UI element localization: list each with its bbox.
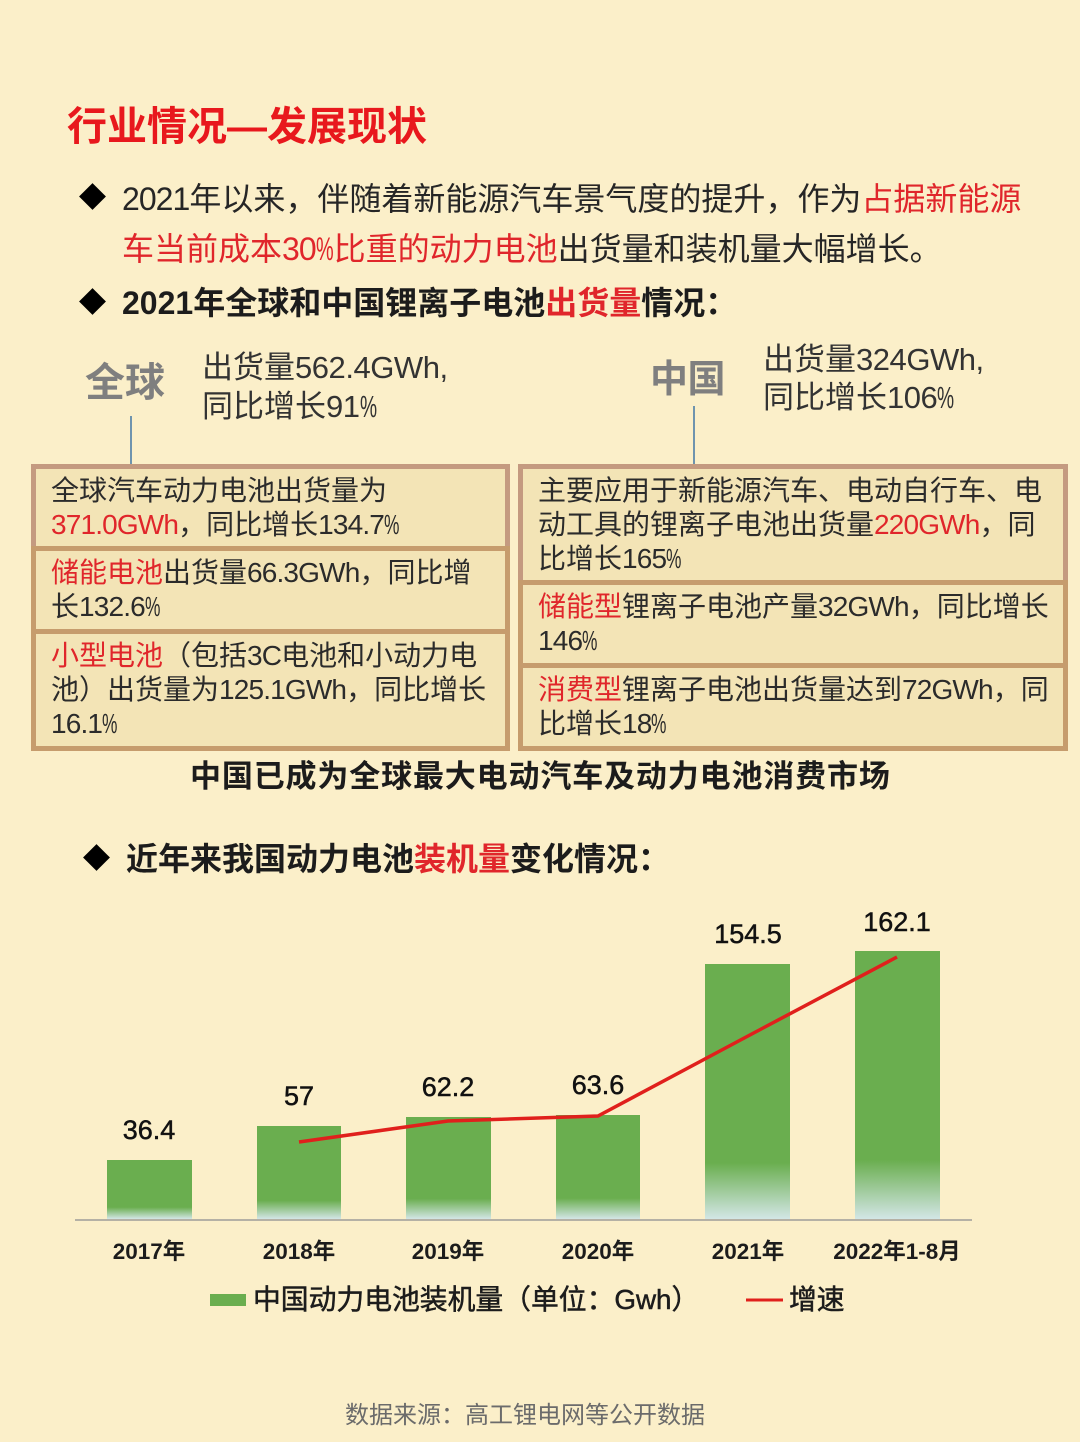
box: consumer type: % <box>651 708 667 739</box>
box: consumer type <box>518 663 1068 751</box>
text: small batteries <box>51 640 486 739</box>
axis line <box>75 1219 972 1221</box>
text: NEV batteries <box>538 475 1042 574</box>
text: energy storage <box>51 557 471 622</box>
bullet icon: shipments <box>79 288 106 315</box>
connector: China <box>693 406 695 466</box>
China totals: 出货量324GWh, <box>763 342 984 377</box>
panel: global breakdown <box>31 464 510 751</box>
box: storage type: % <box>582 625 598 656</box>
China totals: 同比增长106 <box>763 380 937 415</box>
heading: installations: 近年来我国动力电池装机量变化情况： <box>126 841 670 877</box>
China totals: % <box>937 380 954 415</box>
category labels: 2021年 <box>712 1239 784 1264</box>
box: small batteries: % <box>102 708 118 739</box>
text: power batteries: 全球汽车动力电池出货量为 <box>51 475 387 506</box>
text: NEV batteries: 主要应用于新能源汽车、电动自行车、电 <box>538 475 1042 506</box>
box: NEV batteries: % <box>666 543 682 574</box>
source note: 数据来源：高工锂电网等公开数据 <box>345 1402 705 1429</box>
box: NEV batteries <box>518 464 1068 586</box>
category labels: 2019年 <box>412 1239 484 1264</box>
box: small batteries: 池）出货量为125.1GWh，同比增长 <box>51 674 486 705</box>
bar value labels: 162.1 <box>863 907 931 937</box>
box: energy storage <box>31 546 510 635</box>
box: small batteries <box>31 629 510 751</box>
bar value labels: 62.2 <box>422 1072 474 1102</box>
bar value labels: 57 <box>284 1081 314 1111</box>
callout: market statement: 中国已成为全球最大电动汽车及动力电池消费市场 <box>190 759 891 794</box>
bullet icon: intro <box>79 183 106 210</box>
text: storage type <box>538 591 1049 656</box>
box: small batteries: 16.1 <box>51 708 102 739</box>
label: global: 全球 <box>85 361 165 405</box>
text: consumer type <box>538 674 1049 739</box>
bar value labels: 154.5 <box>714 919 782 949</box>
text: storage type: 储能型锂离子电池产量32GWh，同比增长 <box>538 591 1049 622</box>
box: consumer type: 比增长18 <box>538 708 651 739</box>
bar value labels: 63.6 <box>572 1070 624 1100</box>
box: power batteries: % <box>384 509 399 540</box>
box: NEV batteries: 比增长165 <box>538 543 666 574</box>
China totals <box>763 342 984 415</box>
bar value labels: 36.4 <box>123 1115 175 1145</box>
intro paragraph: % <box>316 231 333 267</box>
text: consumer type: 消费型锂离子电池出货量达到72GWh，同 <box>538 674 1049 705</box>
category labels <box>113 1239 961 1264</box>
legend: bars: 中国动力电池装机量（单位：Gwh） <box>253 1284 699 1315</box>
global totals: 出货量562.4GWh, <box>202 350 448 385</box>
bars <box>107 951 940 1219</box>
intro paragraph: 2021年以来，伴随着新能源汽车景气度的提升，作为占据新能源 <box>122 181 1021 217</box>
bullet icon: installations <box>83 844 110 871</box>
panel: China breakdown <box>518 464 1068 751</box>
box: power batteries: 371.0GWh，同比增长134.7 <box>51 509 384 540</box>
box: energy storage: 长132.6 <box>51 591 145 622</box>
box: power batteries <box>31 464 510 552</box>
legend: growth rate: 增速 <box>789 1284 845 1315</box>
global totals: % <box>360 389 377 424</box>
box: energy storage: % <box>145 591 160 622</box>
title: 行业情况—发展现状 <box>67 105 427 149</box>
heading: shipments: 2021年全球和中国锂离子电池出货量情况： <box>122 285 737 321</box>
bar value labels <box>123 907 931 1145</box>
text: small batteries: 小型电池（包括3C电池和小动力电 <box>51 640 477 671</box>
intro paragraph <box>122 181 1021 267</box>
label: China: 中国 <box>650 359 725 401</box>
global totals <box>202 350 448 424</box>
text: energy storage: 储能电池出货量66.3GWh，同比增 <box>51 557 471 588</box>
box: NEV batteries: 动工具的锂离子电池出货量220GWh，同 <box>538 509 1036 540</box>
global totals: 同比增长91 <box>202 389 360 424</box>
connector: global <box>130 416 132 466</box>
box: storage type: 146 <box>538 625 582 656</box>
category labels: 2022年1-8月 <box>833 1239 961 1264</box>
legend: growth rate <box>746 1284 845 1315</box>
growth-rate line <box>299 957 897 1142</box>
category labels: 2017年 <box>113 1239 185 1264</box>
category labels: 2018年 <box>263 1239 335 1264</box>
intro paragraph: 车当前成本30 比重的动力电池出货量和装机量大幅增长。 <box>122 231 942 267</box>
box: storage type <box>518 580 1068 669</box>
text: power batteries <box>51 475 399 540</box>
category labels: 2020年 <box>562 1239 634 1264</box>
